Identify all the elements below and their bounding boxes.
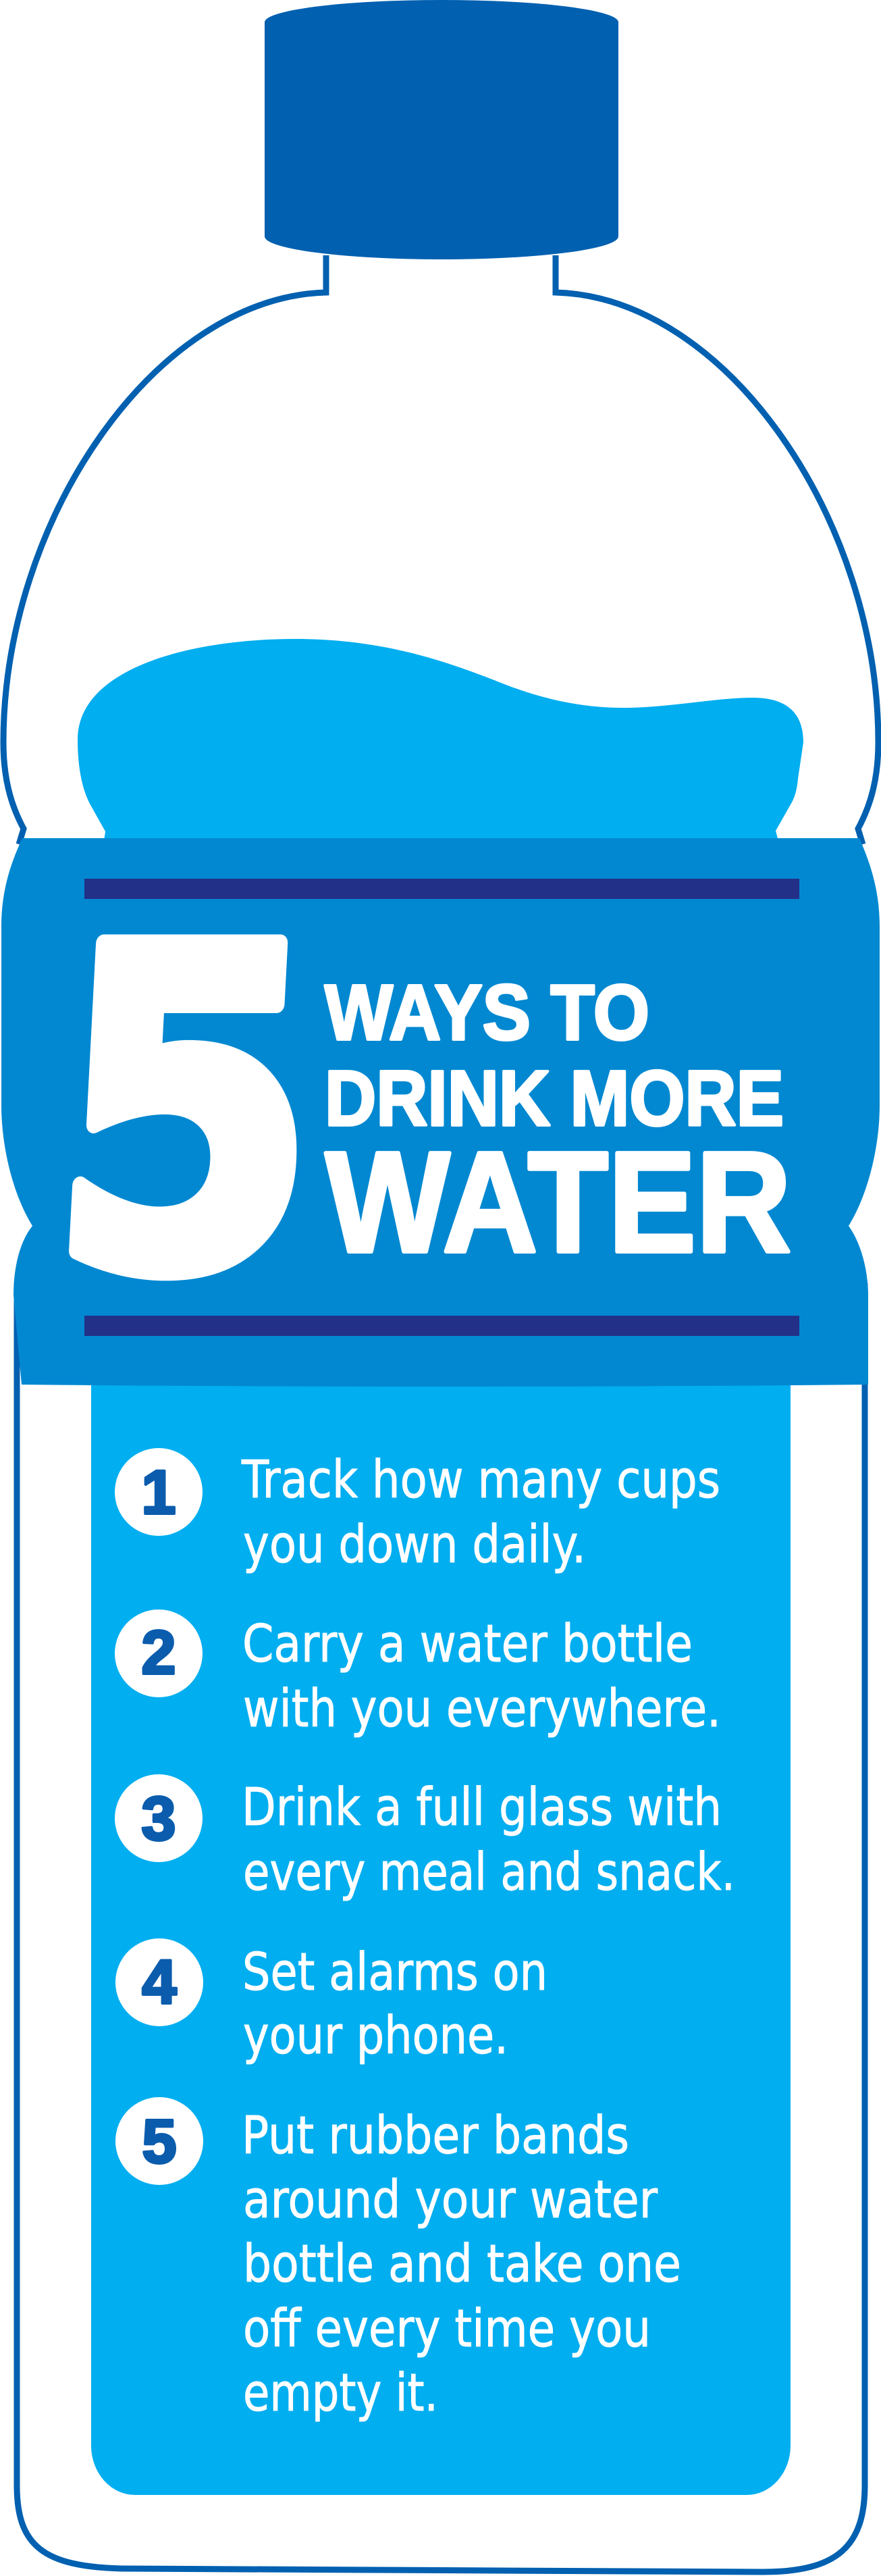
number badge 3 <box>115 1774 203 1862</box>
heading <box>41 855 791 1370</box>
tip 4 text: your phone. <box>243 2006 508 2066</box>
top bar <box>84 879 799 899</box>
heading line 2: DRINK MORE <box>325 1054 784 1142</box>
number badge 5 <box>115 2097 203 2185</box>
tip 1 text <box>241 1450 720 1575</box>
number badge 4: 4 <box>142 1948 177 2017</box>
number badge 2: 2 <box>141 1618 176 1687</box>
band background <box>1 838 880 1387</box>
tip 4 <box>115 1938 548 2066</box>
panel background <box>91 1378 791 2495</box>
tip 5 text <box>242 2106 681 2423</box>
panel: label band <box>1 838 880 1387</box>
heading line 3: WATER <box>325 1122 791 1282</box>
bottle cap <box>265 0 618 259</box>
number badge 5: 5 <box>142 2107 177 2176</box>
tip 1 text: you down daily. <box>243 1515 586 1575</box>
tip 5 text: empty it. <box>243 2363 438 2423</box>
bottom bar <box>84 1316 799 1336</box>
tip 1 <box>115 1448 720 1575</box>
tip 2 text: with you everywhere. <box>243 1679 721 1739</box>
tip 5 text: bottle and take one <box>243 2234 681 2294</box>
panel: tips <box>91 1378 791 2495</box>
tip 3 text: Drink a full glass with <box>242 1778 722 1838</box>
number badge 4 <box>115 1938 203 2026</box>
tip 2 text <box>242 1614 721 1739</box>
water surface <box>78 639 803 841</box>
tip 4 text: Set alarms on <box>242 1942 548 2003</box>
tip 5 text: off every time you <box>243 2299 651 2359</box>
number badge 3: 3 <box>141 1784 176 1853</box>
tip 4 text <box>242 1942 548 2066</box>
tip 2 text: Carry a water bottle <box>242 1614 693 1674</box>
heading line 1: WAYS TO <box>325 969 649 1056</box>
tip 5 text: around your water <box>243 2170 658 2230</box>
number badge 1: 1 <box>141 1458 176 1527</box>
tip 3 text <box>242 1778 735 1903</box>
tip 2 <box>115 1609 721 1739</box>
tip 3 text: every meal and snack. <box>243 1843 735 1903</box>
big numeral 5: 5 <box>41 855 331 1370</box>
tip 5 text: Put rubber bands <box>242 2106 629 2166</box>
tip 5 <box>115 2097 681 2423</box>
tip 1 text: Track how many cups <box>241 1450 720 1510</box>
tip 3 <box>115 1774 735 1903</box>
number badge 2 <box>115 1609 203 1697</box>
number badge 1 <box>115 1448 203 1536</box>
